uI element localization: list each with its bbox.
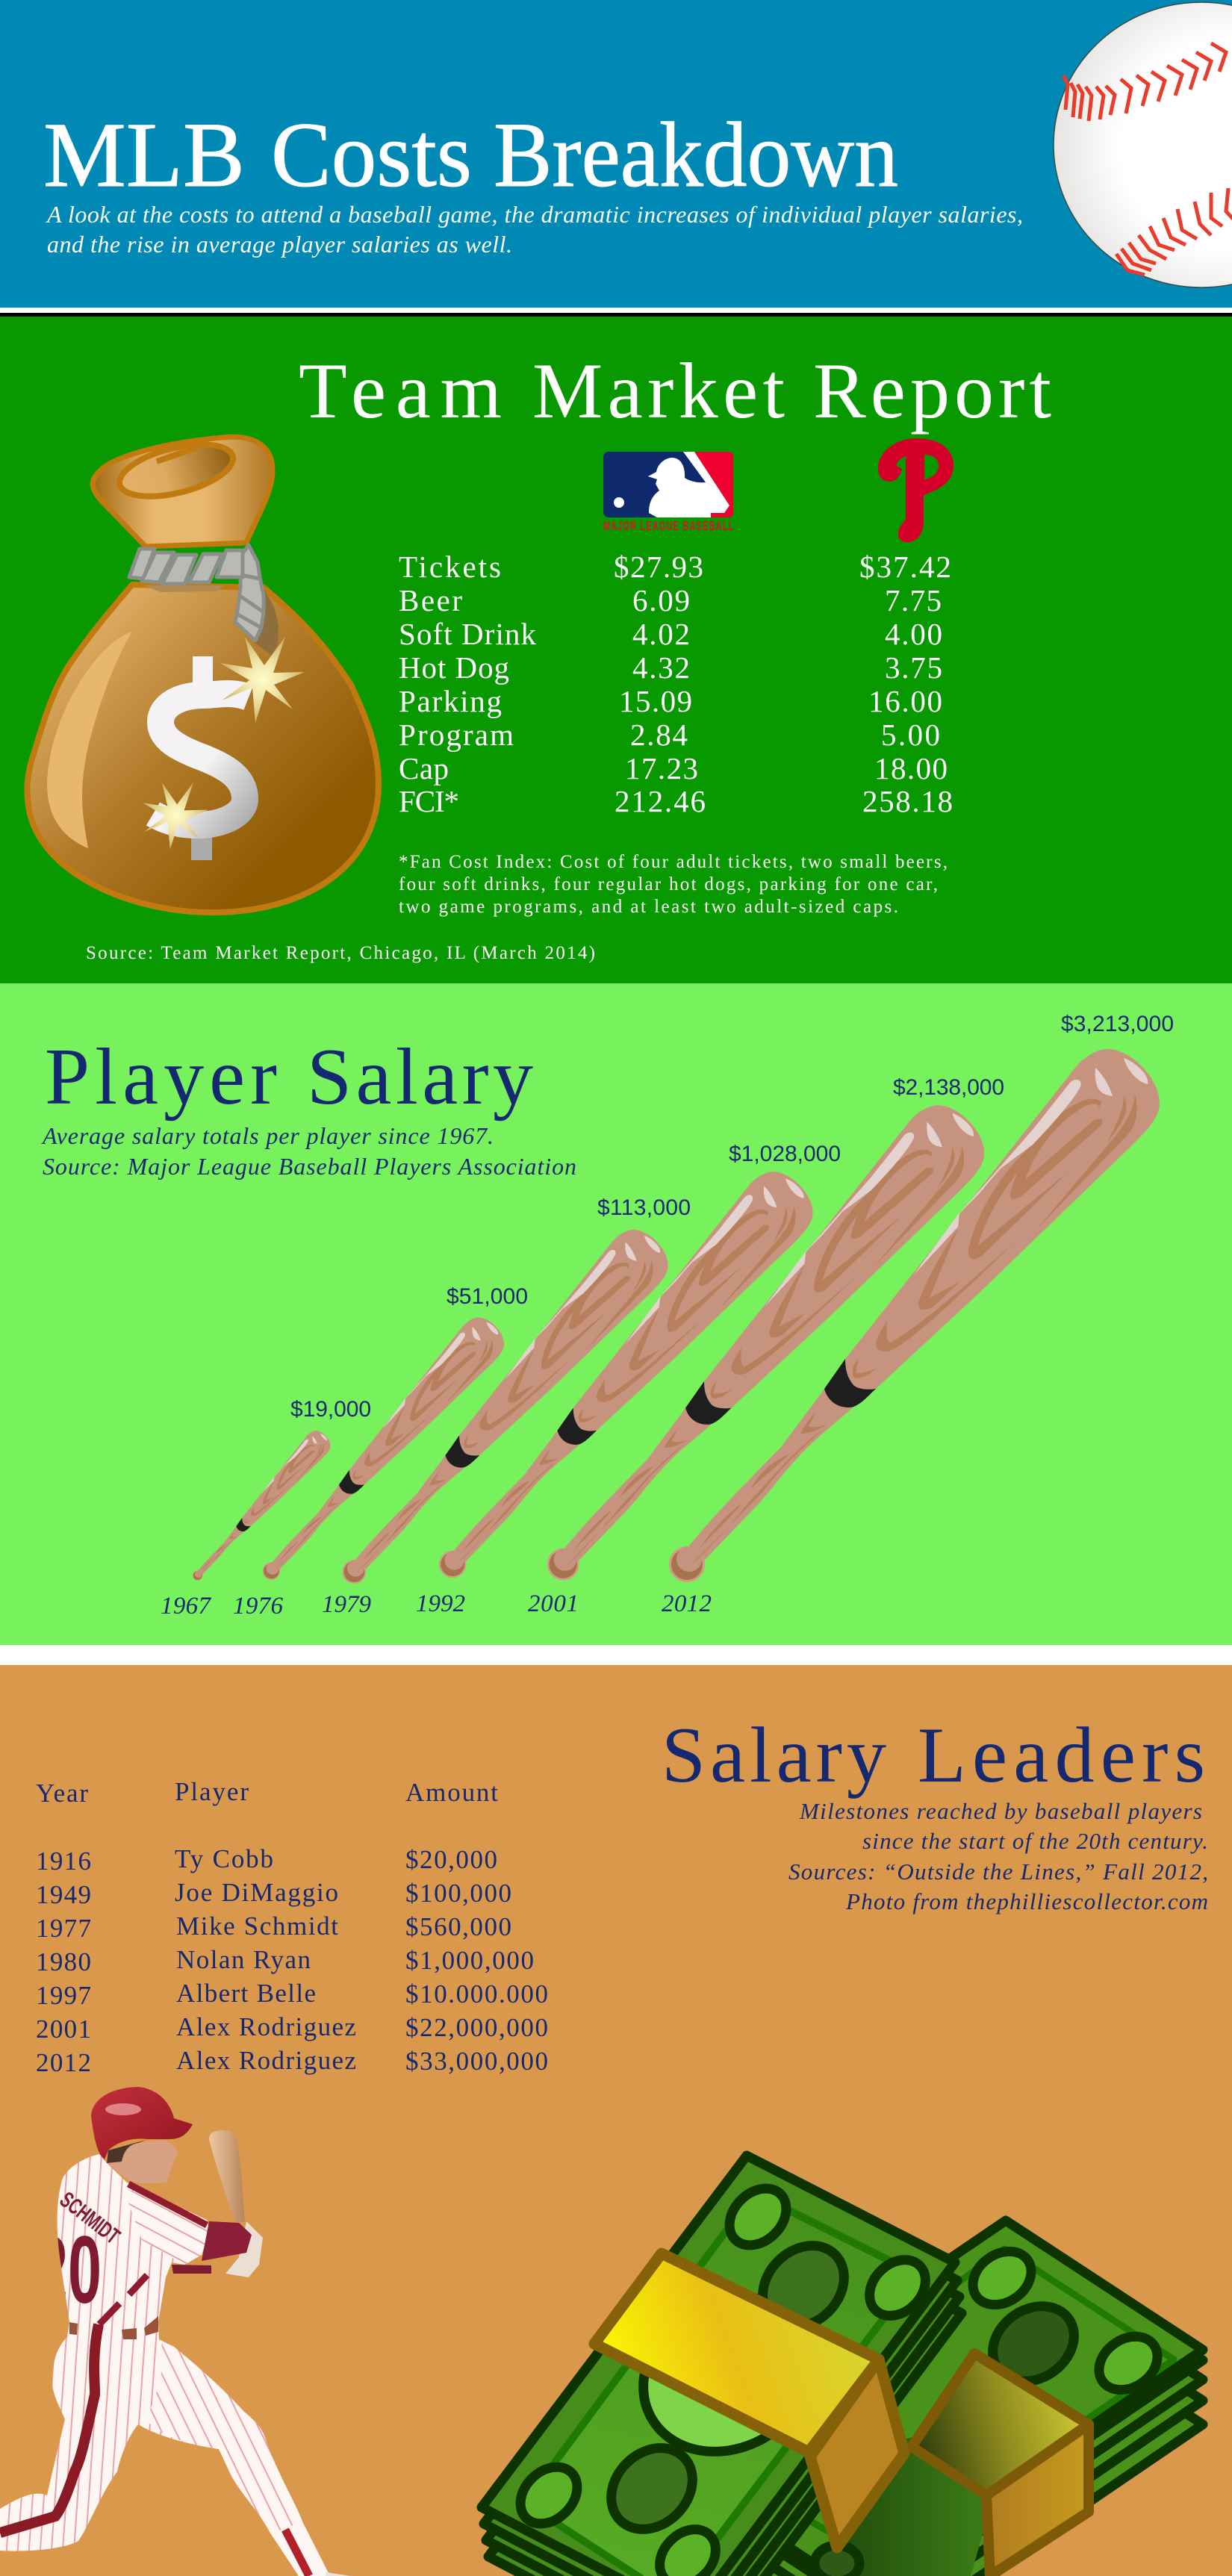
heading: salary leaders: Salary <box>662 1711 886 1799</box>
table: MLB values: 4.32 <box>632 650 690 685</box>
table: cost labels: Hot Dog <box>399 650 509 685</box>
amounts: $10.000.000 <box>405 1979 548 2009</box>
table: MLB values: 15.09 <box>619 684 692 718</box>
amounts: $33,000,000 <box>405 2047 548 2076</box>
years: 1980 <box>36 1947 91 1976</box>
players: Albert Belle <box>176 1979 316 2008</box>
table: cost labels: Program <box>399 718 514 752</box>
players: Joe DiMaggio <box>175 1878 338 1907</box>
bat year labels: 1992 <box>416 1590 465 1617</box>
column headers: Amount <box>405 1778 498 1807</box>
bat year labels: 2012 <box>662 1590 712 1617</box>
table: Phillies values: 18.00 <box>874 751 948 785</box>
years: 1916 <box>36 1847 91 1876</box>
amounts: $100,000 <box>405 1879 511 1908</box>
front money stack <box>482 2156 962 2576</box>
subtitle: and the rise in average player salaries as well. <box>47 231 512 258</box>
photo: batter: SCHMIDT <box>55 2188 125 2249</box>
logo: MLB: MAJOR LEAGUE BASEBALL <box>603 519 733 534</box>
column headers: Player <box>175 1777 249 1806</box>
description: Photo from thephilliescollector.com <box>845 1888 1208 1914</box>
subtitle: A look at the costs to attend a baseball game, the dramatic increases of individual player salaries, <box>46 201 1023 228</box>
right money stack <box>655 2221 1203 2576</box>
table: cost labels: FCI* <box>399 784 459 818</box>
players: Ty Cobb <box>175 1844 273 1873</box>
table: MLB values <box>614 550 706 818</box>
table: Phillies values: 3.75 <box>885 650 942 685</box>
description: since the start of the 20th century. <box>862 1828 1208 1854</box>
years: 1949 <box>36 1880 91 1909</box>
icon: money stacks <box>482 2156 1203 2576</box>
players: Alex Rodriguez <box>176 2046 356 2075</box>
table: salary leaders <box>36 1777 548 2077</box>
heading: salary leaders: Leaders <box>918 1711 1205 1799</box>
table: Phillies values: $37.42 <box>859 550 951 584</box>
panel: header <box>0 0 1232 308</box>
logo: MLB <box>603 452 733 534</box>
amounts: $1,000,000 <box>405 1946 534 1975</box>
years <box>36 1847 91 2077</box>
bat: 1979 <box>342 1230 668 1584</box>
heading: team market report <box>299 347 1051 435</box>
icon: baseball <box>1054 2 1232 287</box>
title: MLB <box>43 104 245 206</box>
bat year labels: 1976 <box>233 1593 284 1620</box>
bat: 2001 <box>547 1105 984 1580</box>
panel: team market report <box>0 317 1232 983</box>
logo: Phillies P <box>878 438 953 542</box>
heading: team market report: Report <box>813 347 1051 435</box>
paper band 1 <box>594 2253 904 2548</box>
title <box>43 104 898 206</box>
years: 1997 <box>36 1981 91 2010</box>
photo: batter: 20 <box>34 2217 102 2324</box>
table: cost labels: Soft Drink <box>399 617 536 651</box>
bat value labels: $2,138,000 <box>893 1075 1004 1100</box>
footnote: four soft drinks, four regular hot dogs, parking for one car, <box>399 874 938 895</box>
panel: player salary <box>0 983 1232 1645</box>
table: MLB values: 2.84 <box>630 718 688 752</box>
table: MLB values: $27.93 <box>614 550 703 584</box>
heading: salary leaders <box>662 1711 1205 1799</box>
bat value labels: $113,000 <box>597 1195 691 1220</box>
table: Phillies values: 7.75 <box>885 583 942 617</box>
footnote: *Fan Cost Index: Cost of four adult tickets, two small beers, <box>399 852 948 872</box>
players <box>175 1844 356 2075</box>
bat value labels: $3,213,000 <box>1061 1012 1174 1036</box>
bat year labels <box>161 1590 712 1620</box>
subheading: Average salary totals per player since 1967. <box>41 1122 494 1149</box>
amounts: $20,000 <box>405 1845 497 1874</box>
heading: player salary: Salary <box>307 1033 533 1121</box>
photo: batter <box>0 2087 351 2576</box>
years: 2001 <box>36 2015 91 2044</box>
bat value labels: $19,000 <box>290 1397 371 1422</box>
subheading <box>41 1122 576 1180</box>
description: Sources: “Outside the Lines,” Fall 2012, <box>788 1858 1208 1885</box>
bat value labels <box>290 1012 1174 1422</box>
table: cost labels: Cap <box>399 751 449 785</box>
players: Nolan Ryan <box>176 1945 311 1974</box>
icon: dollar sign <box>153 656 249 860</box>
bat value labels: $1,028,000 <box>729 1142 841 1166</box>
table: MLB values: 4.02 <box>632 617 690 651</box>
heading: player salary: Player <box>45 1033 277 1121</box>
description: Milestones reached by baseball players <box>799 1798 1202 1824</box>
footnote <box>399 852 948 917</box>
table: Phillies values: 4.00 <box>885 617 942 651</box>
description <box>788 1798 1208 1914</box>
table: Phillies values: 5.00 <box>881 718 940 752</box>
table: MLB values: 6.09 <box>632 583 690 617</box>
table: MLB values: 17.23 <box>625 751 698 785</box>
paper band 2 <box>912 2353 1089 2576</box>
players: Mike Schmidt <box>176 1911 338 1941</box>
years: 2012 <box>36 2048 91 2077</box>
bat: 1992 <box>439 1172 813 1578</box>
title: Costs <box>271 104 472 206</box>
footnote: two game programs, and at least two adult-sized caps. <box>399 897 898 917</box>
title: Breakdown <box>494 104 898 206</box>
table: Phillies values <box>859 550 953 818</box>
source: Source: Team Market Report, Chicago, IL (March 2014) <box>86 943 595 963</box>
heading: player salary <box>45 1033 533 1121</box>
years: 1977 <box>36 1914 91 1943</box>
amounts <box>405 1845 548 2076</box>
bat: 2012 <box>669 1049 1160 1582</box>
column headers: Year <box>36 1779 88 1808</box>
subheading: Source: Major League Baseball Players Association <box>43 1153 576 1180</box>
bat: 1976 <box>263 1318 504 1580</box>
panel: salary leaders <box>0 1665 1232 2576</box>
table: cost labels <box>399 550 536 818</box>
bat year labels: 1979 <box>322 1591 371 1618</box>
players: Alex Rodriguez <box>176 2012 356 2041</box>
bat value labels: $51,000 <box>447 1284 528 1309</box>
bat year labels: 2001 <box>528 1590 579 1617</box>
column headers <box>36 1777 498 1808</box>
subtitle <box>46 201 1023 258</box>
icon: money bag <box>27 435 379 912</box>
heading: team market report: Market <box>532 347 785 435</box>
amounts: $560,000 <box>405 1912 511 1941</box>
table: MLB values: 212.46 <box>615 784 706 818</box>
table: cost labels: Beer <box>399 583 462 617</box>
bat chart <box>193 1049 1160 1584</box>
bat year labels: 1967 <box>161 1593 212 1620</box>
bat: 1967 <box>193 1431 331 1581</box>
table: cost labels: Parking <box>399 684 502 718</box>
amounts: $22,000,000 <box>405 2013 548 2042</box>
table: cost labels: Tickets <box>399 550 501 584</box>
table: Phillies values: 16.00 <box>868 684 942 718</box>
table: Phillies values: 258.18 <box>862 784 953 818</box>
heading: team market report: Team <box>299 347 502 435</box>
